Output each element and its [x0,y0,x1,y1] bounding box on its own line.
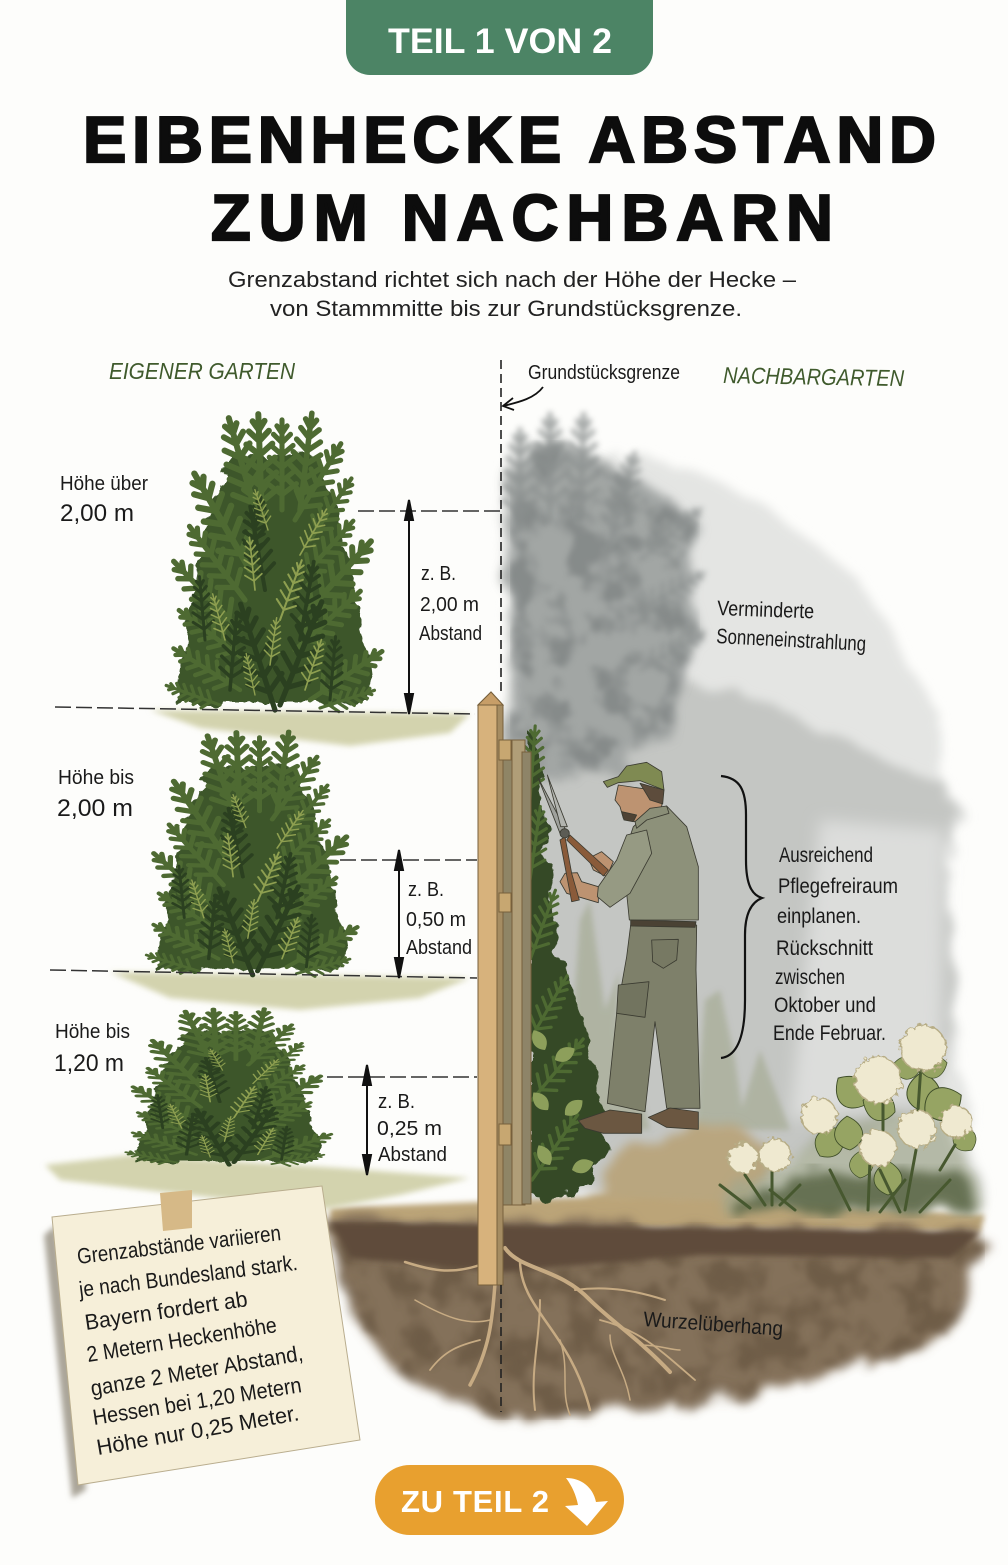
bush: height up to 2.00 m [143,730,365,981]
subtitle: von Stammmitte bis zur Grundstücksgrenze. [270,296,742,321]
flowers [720,1025,985,1215]
measurement dashed lines [50,511,500,1077]
height labels: 2,00 m [57,795,133,822]
head [615,785,663,822]
soil [325,1222,985,1420]
label: root overhang: Wurzelüberhang [643,1308,784,1341]
height labels: 2,00 m [60,500,134,527]
distance labels [377,563,482,1166]
boundary arrow [503,387,543,410]
subtitle: Grenzabstand richtet sich nach der Höhe der Hecke – [228,267,797,292]
label: maintenance space: Oktober und [774,994,876,1017]
note text: Bayern fordert ab [83,1286,249,1335]
label: maintenance space: einplanen. [777,905,861,928]
title: ZUM NACHBARN [211,181,833,254]
distance labels: z. B. [408,879,444,901]
main post [478,692,503,1285]
height labels: 1,20 m [54,1050,124,1077]
bush: height up to 1.20 m [123,1008,338,1169]
label: maintenance space: Ende Februar. [773,1022,886,1045]
note text: ganze 2 Meter Abstand, [89,1340,305,1401]
back hand [588,852,613,877]
bush: height over 2.00 m [163,411,390,717]
icon: arrow [565,1478,608,1526]
distance labels: Abstand [406,937,472,959]
leaves [809,1052,981,1195]
distance labels: 2,00 m [420,594,479,616]
shadow hedge [504,413,710,790]
distance labels: z. B. [378,1091,415,1113]
shirt [627,806,698,920]
label: maintenance space: Ausreichend [779,844,873,867]
title [83,103,936,254]
grey wash background [505,445,985,1215]
title: EIBENHECKE ABSTAND [83,103,936,176]
distance labels: 0,50 m [406,909,466,931]
distance labels: 0,25 m [377,1118,442,1140]
neighbour garden illustration [325,413,985,1420]
tape [160,1190,192,1231]
note text: Höhe nur 0,25 Meter. [95,1400,301,1460]
next part button [375,1465,624,1535]
label: maintenance space [773,844,898,1045]
dimension arrows [363,500,413,1175]
note text [76,1220,305,1460]
distance labels: Abstand [419,623,482,645]
background plants [565,900,790,1130]
label: maintenance space: Rückschnitt [776,937,873,960]
distance labels: Abstand [378,1144,447,1166]
belt [631,920,696,927]
note text: Hessen bei 1,20 Metern [91,1372,303,1430]
label: maintenance space: zwischen [775,966,845,989]
boards behind post [503,740,513,1205]
blossoms [728,1025,972,1173]
top badge: TEIL 1 VON 2 [388,22,612,61]
stems and grass [720,1065,955,1212]
label: maintenance space: Pflegefreiraum [778,875,898,898]
roots [405,1248,695,1415]
heading: own garden: EIGENER GARTEN [109,358,295,384]
boots [578,1110,642,1133]
collar [635,806,669,828]
front arm [560,873,598,903]
height labels [54,473,148,1077]
heading: neighbour garden: NACHBARGARTEN [723,362,905,391]
clipped hedge at boundary [518,725,607,1200]
label: reduced sunlight: Sonneneinstrahlung [716,625,867,656]
top badge [346,0,653,75]
distance labels: z. B. [421,563,456,585]
left garden ground washes [45,710,470,1210]
gardener trimming hedge [538,762,700,1133]
trousers [607,925,700,1112]
house shadow [505,680,950,1190]
height labels: Höhe über [60,473,148,495]
height labels: Höhe bis [58,767,134,789]
height labels: Höhe bis [55,1021,130,1043]
label: boundary: Grundstücksgrenze [528,362,680,384]
note text: je nach Bundesland stark. [77,1250,299,1302]
curly brace [721,776,762,1058]
note text: Grenzabstände variieren [76,1220,282,1269]
note card [44,1186,360,1498]
label: reduced sunlight: Verminderte [717,597,815,623]
fence posts [478,692,531,1285]
cap [603,762,664,790]
subtitle [228,267,797,321]
brackets [499,740,511,760]
label: reduced sunlight [716,597,867,656]
sleeve [597,830,652,907]
next part button: ZU TEIL 2 [401,1484,549,1519]
shears [560,837,579,902]
note text: 2 Metern Heckenhöhe [85,1312,278,1367]
boundary line [500,360,502,1412]
path and ground strip [590,1125,780,1210]
